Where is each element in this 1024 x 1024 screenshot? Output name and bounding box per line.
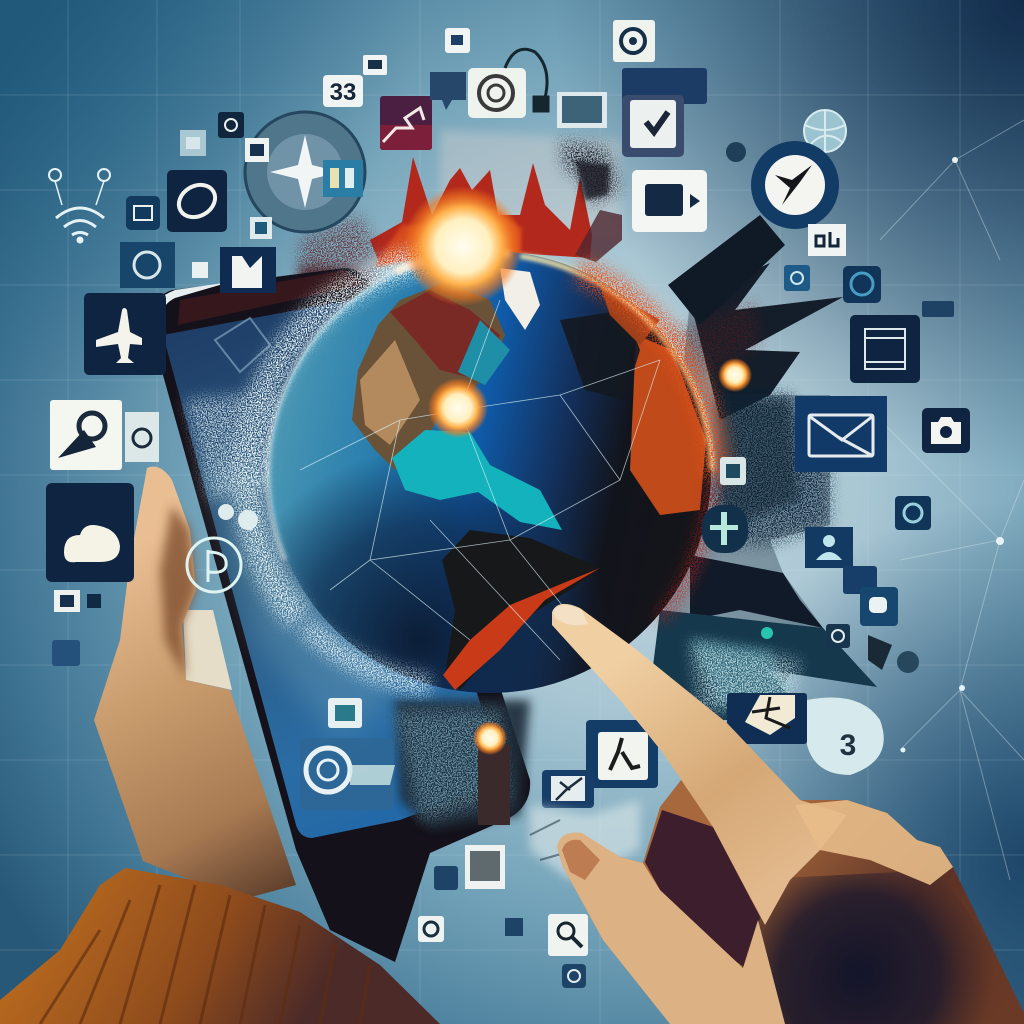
splash: city skyline above the globe xyxy=(300,130,622,310)
app icon tile group: left xyxy=(46,112,365,666)
tile: numerals: 33 xyxy=(330,79,356,106)
tile: headset lines xyxy=(505,49,548,111)
tile: route xyxy=(542,770,594,808)
thumb and palm xyxy=(94,466,296,900)
thumb shadow xyxy=(160,505,196,680)
tile: small square xyxy=(445,28,470,53)
tile: small xyxy=(126,196,160,230)
tile: numerals xyxy=(323,75,363,107)
phone screen xyxy=(163,300,505,838)
tile: stacked small xyxy=(125,412,159,462)
tile: numeric xyxy=(808,224,846,256)
tile: small dark xyxy=(434,866,458,890)
tile: search xyxy=(548,914,588,956)
magnifier compass icon xyxy=(751,141,839,229)
continent: north america xyxy=(352,282,505,470)
globe left soft rim xyxy=(268,258,440,560)
maroon gap between fingers xyxy=(645,810,760,970)
tile: check stack xyxy=(622,68,707,157)
tile: camera xyxy=(922,408,970,453)
phone lower dust xyxy=(395,700,530,830)
skyline orange base xyxy=(373,208,522,268)
tile: speech bubble xyxy=(430,72,466,110)
pale dust under the phone xyxy=(530,800,640,880)
flare on the continent xyxy=(428,378,488,438)
tile: screen small xyxy=(250,217,272,239)
tile: window xyxy=(850,315,920,383)
tile: side xyxy=(245,138,269,162)
back of hand xyxy=(557,730,1024,1024)
app icon tile group: top xyxy=(323,20,707,157)
tile: target xyxy=(613,20,655,62)
tile: map xyxy=(727,693,807,744)
tile: bookmark xyxy=(220,247,276,293)
tile: aeroplane xyxy=(84,293,166,375)
tile: walker xyxy=(586,720,658,788)
tile: small pair xyxy=(52,590,101,666)
tile: dark person xyxy=(702,505,748,553)
globe right rim embers xyxy=(578,270,716,480)
tile: white blob xyxy=(807,698,884,775)
tile: circle small xyxy=(418,916,444,942)
lower finger shadow xyxy=(562,840,600,880)
tile: cloud xyxy=(46,483,134,582)
tile: maroon path xyxy=(380,96,432,150)
tile: map pin xyxy=(50,400,122,470)
tile: small dark xyxy=(218,112,244,138)
globe left dust rim xyxy=(247,256,444,620)
phone screen haze xyxy=(200,450,400,740)
tile: small mark xyxy=(868,635,892,670)
tile: small screen xyxy=(363,55,387,75)
tile: screen left xyxy=(300,738,395,810)
tile: dark xyxy=(843,566,877,594)
phone body xyxy=(147,268,530,962)
globe lower right rim embers xyxy=(660,480,712,620)
tile: photo dark xyxy=(465,845,505,889)
tile: small compass xyxy=(726,142,746,162)
globe xyxy=(247,251,716,693)
continent: south america xyxy=(442,530,600,690)
app icon tile group: right xyxy=(632,110,970,775)
tile: envelope xyxy=(795,396,887,472)
globe right rim glow xyxy=(520,256,712,470)
tile: photo xyxy=(557,92,607,128)
tile: small outline xyxy=(826,624,850,648)
globe sphere xyxy=(269,251,711,693)
lower finger xyxy=(557,833,785,1024)
tile: dot xyxy=(505,918,523,936)
pointing index finger xyxy=(552,604,847,925)
globe lower dust rim xyxy=(305,625,430,686)
tile: pale xyxy=(180,130,206,156)
compass globe icon xyxy=(245,112,365,232)
phone xyxy=(147,268,530,962)
tile: small white xyxy=(720,457,746,485)
sun flare at top of globe xyxy=(403,186,523,306)
continent: central america xyxy=(392,430,562,530)
tile: small frame xyxy=(328,698,362,728)
tile: chat xyxy=(860,587,898,626)
tile: ring small xyxy=(895,496,931,530)
tile: folder xyxy=(632,170,707,232)
flare right of the globe xyxy=(718,358,752,392)
pale dust scribble xyxy=(530,820,575,860)
globe upper rim glow xyxy=(395,252,510,272)
tile: eye xyxy=(120,242,175,288)
tile: tiny blue xyxy=(784,265,810,291)
dark blob xyxy=(560,140,620,205)
magnifier handle xyxy=(668,215,785,325)
tile: slim xyxy=(922,301,954,317)
globe network lines xyxy=(300,300,660,660)
knuckle shading xyxy=(795,800,953,885)
skyline red towers xyxy=(370,157,592,265)
pale gap behind hand xyxy=(183,610,232,690)
tile: dark circle mark xyxy=(897,651,919,673)
left hand xyxy=(94,466,296,900)
tile: planet xyxy=(167,170,227,232)
tile: person xyxy=(805,527,853,568)
tile: ring xyxy=(843,266,881,303)
tile: teal panel xyxy=(323,160,363,197)
splash: dark spikes right of the globe xyxy=(650,263,877,720)
tile: circle dark xyxy=(562,964,586,988)
app icon tile group: bottom xyxy=(300,698,658,988)
continent: polar highlight xyxy=(500,268,540,330)
continent: right landmass xyxy=(630,335,706,515)
phone app ring overlay xyxy=(187,504,258,592)
wifi icon xyxy=(49,169,110,242)
right tower scatter xyxy=(575,210,622,262)
sweater cuff xyxy=(0,868,440,1024)
left skyline ruin xyxy=(300,215,385,310)
right hand xyxy=(552,604,1024,1024)
fingertip nail xyxy=(553,605,588,625)
flare below the globe xyxy=(473,721,507,755)
dark palm core xyxy=(740,870,1024,1024)
tile: tiny xyxy=(192,262,208,278)
tile: concentric circle xyxy=(468,68,526,118)
tile: white blob: 3 xyxy=(840,729,856,762)
network sphere icon xyxy=(804,110,846,152)
phone lower tower xyxy=(478,745,510,825)
skyline dust xyxy=(440,130,620,240)
